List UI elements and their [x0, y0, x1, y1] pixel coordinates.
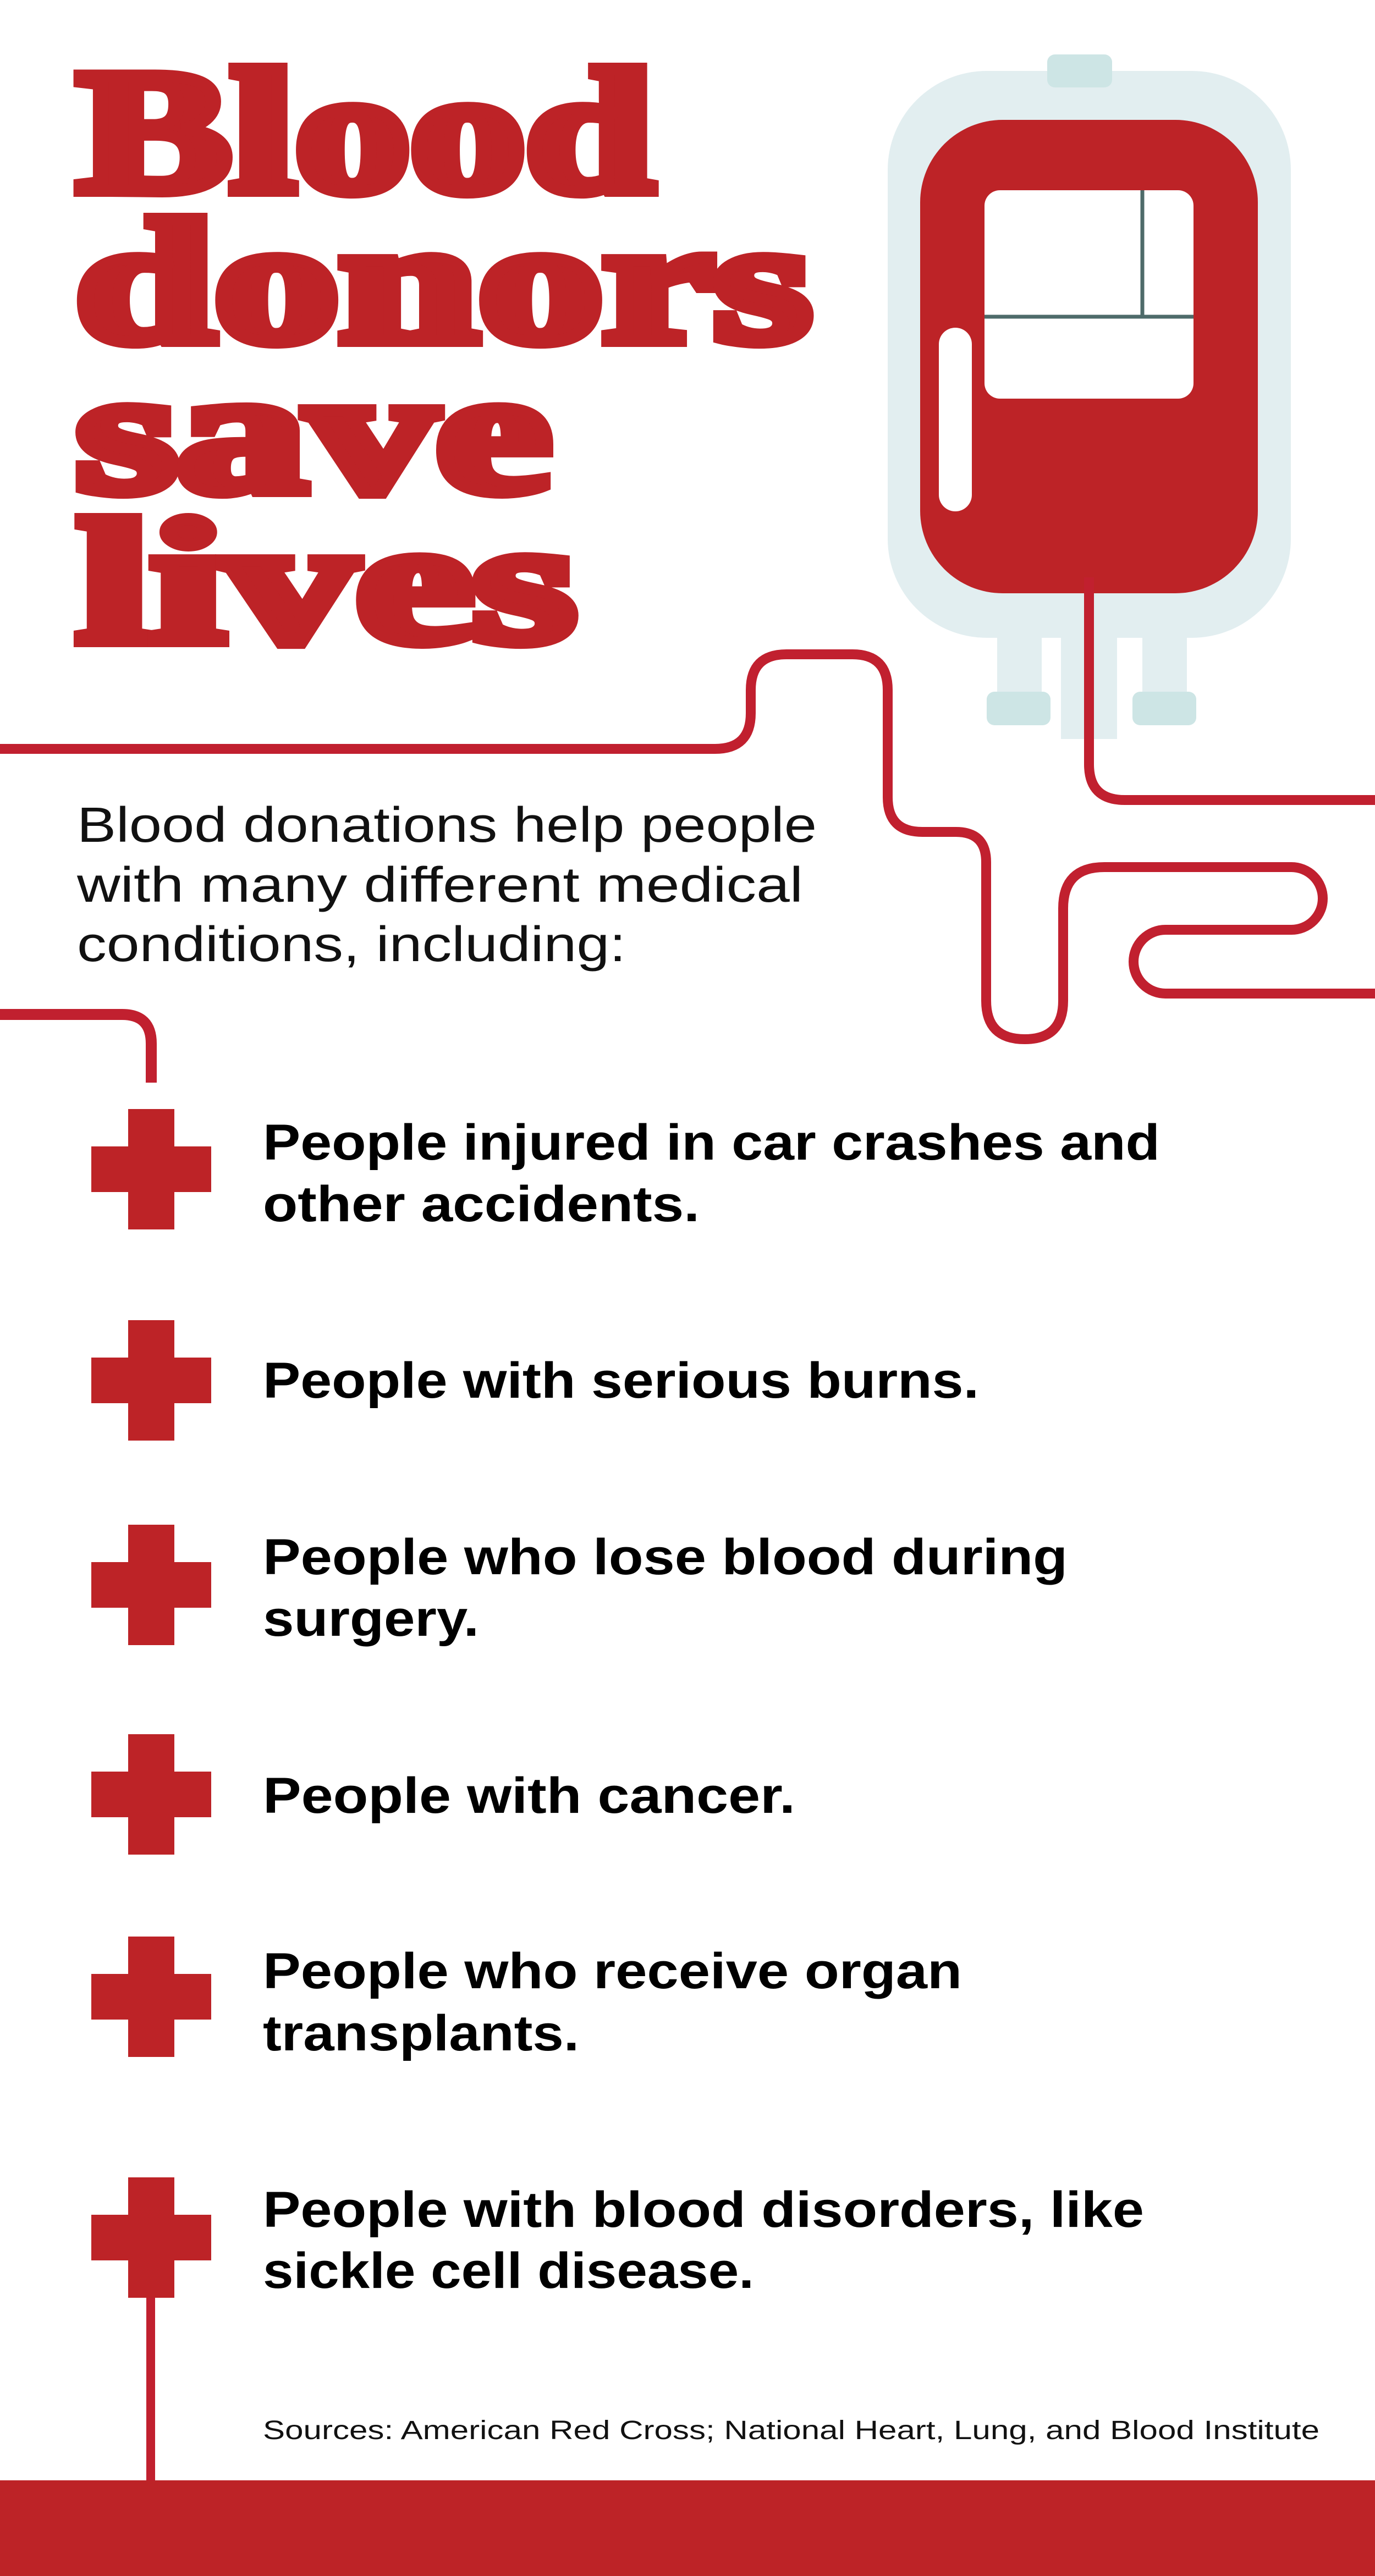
label lines [985, 190, 1194, 317]
bag legs [997, 605, 1187, 739]
icon: cross [91, 1937, 211, 2057]
item 5: People who receive organ [263, 1943, 962, 1999]
item 6: sickle cell disease. [263, 2243, 754, 2299]
item 4 [91, 1734, 795, 1855]
list of conditions [91, 1109, 1160, 2299]
sources: Sources: American Red Cross; National Heart, Lung, and Blood Institute [263, 2416, 1319, 2445]
item 4: People with cancer. [263, 1768, 795, 1824]
label window [985, 190, 1194, 399]
tube from bag [1089, 577, 1375, 800]
icon: cross [91, 1109, 211, 1229]
item 5: transplants. [263, 2005, 579, 2061]
item 2: People with serious burns. [263, 1353, 979, 1409]
item 1: People injured in car crashes and [263, 1115, 1160, 1171]
title: save [76, 335, 551, 529]
bag outer shell [888, 71, 1291, 638]
icon: cross [91, 1320, 211, 1441]
item 3: People who lose blood during [263, 1529, 1068, 1585]
icon: cross [91, 2177, 211, 2298]
intro text: Blood donations help people [77, 798, 817, 853]
item 3 [91, 1525, 1068, 1647]
footer bar [0, 2480, 1375, 2576]
bag leg caps [987, 692, 1196, 725]
tube: connector to list [0, 1014, 151, 1083]
red blood fill [920, 120, 1258, 593]
icon: blood bag [888, 54, 1291, 739]
item 6: People with blood disorders, like [263, 2182, 1144, 2238]
item 1: other accidents. [263, 1176, 700, 1232]
title: donors [75, 185, 811, 379]
intro text [76, 798, 817, 972]
icon: cross [91, 1734, 211, 1855]
title [75, 35, 811, 680]
intro text: conditions, including: [77, 917, 626, 972]
item 5 [91, 1937, 962, 2061]
intro text: with many different medical [76, 858, 803, 913]
title: lives [78, 485, 576, 680]
tube: bottom connector [146, 2293, 155, 2499]
title: Blood [78, 35, 653, 229]
icon: cross [91, 1525, 211, 1645]
bag top cap [1047, 54, 1112, 87]
item 6 [91, 2177, 1144, 2299]
item 2 [91, 1320, 979, 1441]
tube: winding line [0, 654, 1375, 1039]
item 3: surgery. [263, 1591, 479, 1647]
highlight capsule [939, 328, 972, 511]
item 1 [91, 1109, 1160, 1232]
